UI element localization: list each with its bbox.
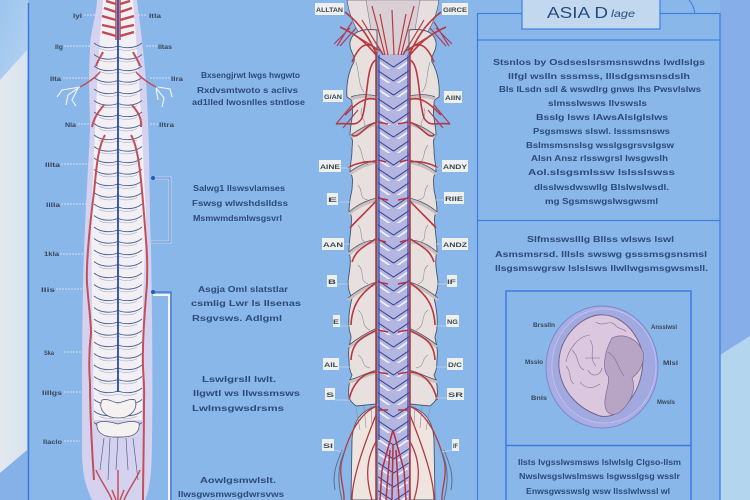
central canal — [378, 55, 409, 500]
text block: note 4: Lwlmsgwsdrsms — [192, 404, 285, 413]
label text: SI — [323, 443, 333, 450]
left anatomy labels: Iltra — [159, 122, 174, 129]
brain labels — [525, 322, 678, 406]
label text: AINE — [320, 164, 341, 171]
text block: overview: dlsslwsdwswllg Blslwslwsdl. — [534, 183, 669, 192]
text block: overview: Ilfgl wslln sssmss, Illsdgsmsnsdslh — [508, 72, 690, 81]
text block: note 5: Ilwsgwsmwsgdwrsvws — [178, 490, 285, 499]
text block: overview: Aol.slsgsmlssw lslsslswss — [528, 168, 676, 177]
text block: note 5: Aowlgsmwlslt. — [200, 476, 276, 485]
left anatomy labels — [41, 13, 183, 446]
text block: note 2: Msmwmdsmlwsgsvrl — [193, 214, 282, 223]
text block: overview: Psgsmsws slswl. lsssmsnsws — [533, 127, 671, 136]
leader lines — [56, 15, 170, 441]
text block: note 3 — [191, 285, 302, 323]
text block: note 3: Asgja Oml slatstlar — [198, 285, 288, 294]
label text: G/AN — [324, 94, 342, 101]
label text: E — [328, 197, 338, 204]
label text: AIIN — [445, 95, 461, 102]
label text: AIL — [324, 362, 338, 369]
label text: ALLTAN — [316, 7, 343, 14]
nerve hands — [57, 87, 172, 107]
left anatomy labels: Iltas — [158, 44, 172, 51]
text block: note 1: Rxdvsmtwoto s aclivs — [197, 86, 299, 95]
label text: S — [326, 392, 335, 399]
right tissue lobes — [409, 12, 452, 500]
label text: IF — [453, 443, 458, 450]
brain labels: Ansslwsl — [651, 324, 677, 331]
label text — [316, 7, 468, 450]
text block: note 1 — [192, 71, 306, 107]
label text: D/C — [448, 362, 462, 369]
label text: E — [333, 319, 340, 326]
label text: ANDZ — [443, 242, 467, 249]
brain — [559, 315, 643, 416]
left anatomy labels: Ilg — [55, 44, 63, 51]
brain caption: Ilsts Ivgsslwsmsws lslwlslg Clgso-llsm — [518, 458, 681, 467]
outer membrane — [546, 306, 658, 428]
left tissue lobes — [334, 12, 377, 500]
brain caption: Nwslwsgslwslmsws lsgwsslgsg wsslr — [519, 472, 680, 481]
left anatomy labels: Ilaclo — [43, 439, 62, 446]
brain caption — [518, 458, 681, 496]
body silhouette — [82, 0, 152, 500]
text block: summary — [495, 235, 708, 273]
left anatomy labels: lyl — [73, 13, 82, 20]
vertebrae column — [91, 0, 146, 480]
text block: note 4 — [192, 375, 301, 413]
text block: overview — [493, 58, 706, 206]
text block: note 4: Lswlgrsll lwlt. — [202, 375, 276, 384]
title box: ASIA D — [547, 5, 608, 22]
text block: summary: Asmsmsrsd. Illsls swswg gsssmsgsnsmsl — [495, 250, 707, 259]
brain caption: Enwsgwsswslg wsw Ilsslwlwssl wl — [526, 487, 670, 496]
brain folds — [566, 322, 626, 388]
brain labels: Mwsls — [657, 399, 675, 406]
left anatomy labels: 1kla — [44, 251, 59, 258]
text block: overview: Stsnlos by Osdseslsrsmsnswdns lwdlslgs — [493, 58, 706, 67]
left anatomy labels: Nla — [65, 122, 76, 129]
brain labels: Msslo — [525, 359, 543, 366]
left anatomy labels: Illta — [45, 162, 61, 169]
figure: central spinal column detail — [334, 0, 452, 500]
left anatomy labels: Ilra — [171, 76, 183, 83]
left frame line — [28, 3, 30, 500]
left anatomy labels: Ilis — [41, 287, 56, 294]
text block: summary: Ilsgsmswgrsw lslslsws Ilwllwgsmsgwsmsll. — [495, 264, 708, 273]
left anatomy labels: Ilta — [50, 76, 61, 83]
label text: GIRCE — [443, 7, 468, 14]
left anatomy labels: Iillgs — [42, 390, 63, 397]
label text: AAN — [323, 242, 343, 249]
text block: overview: slmsslwsws Ilvswsls — [548, 99, 648, 108]
inner membrane line — [552, 309, 656, 423]
text block: overview: Bls lLsdn sdl & wswdlrg gnws lhs Pwsvlslws — [499, 85, 702, 94]
top core — [366, 0, 420, 55]
text block: overview: Bsslg lsws lAwsAlslgIslws — [536, 113, 669, 122]
text block: note 1: Bxsengjrwt lwgs hwgwto — [201, 71, 300, 80]
center nerve — [117, 0, 119, 392]
brain labels: Bnls — [531, 395, 547, 402]
text block: overview: Alsn Ansz rlsswgrsl lwsgwslh — [531, 154, 668, 163]
title box: lage — [611, 9, 636, 20]
text block: note 5 — [178, 476, 285, 499]
text block: summary: Slfmsswslllg Bllss wlsws lswl — [527, 235, 674, 244]
text block: note 2 — [192, 184, 289, 223]
panel: right column frame — [478, 0, 720, 500]
text block: note 3: Rsgvsws. Adlgml — [192, 314, 282, 323]
panel frame — [506, 291, 691, 500]
text block: note 2: Fswsg wlwshdslldss — [192, 199, 289, 208]
text block: note 1: ad1lled lwosnlles stntlose — [192, 98, 306, 107]
brain darker lobe — [605, 336, 643, 414]
text block: overview: Bslmsmsnslsg wsslgsgrsvslgsw — [526, 141, 675, 150]
label text: IF — [447, 279, 456, 286]
bracket: lower — [151, 290, 171, 500]
label text: RIIE — [445, 196, 464, 203]
figure: full spine anatomy — [56, 0, 172, 500]
label text: NG — [447, 319, 458, 326]
label text: SR — [448, 392, 464, 399]
central figure labels — [315, 3, 468, 452]
panel: brain cross-section — [506, 291, 691, 500]
canal red branches — [378, 122, 408, 500]
label text: B — [328, 279, 337, 286]
title box — [522, 0, 660, 29]
brain labels: Brsslln — [533, 322, 555, 329]
top brainstem cap — [347, 0, 439, 36]
left anatomy labels: Ska — [44, 350, 54, 357]
top red fan — [350, 6, 436, 55]
label leaders — [334, 168, 452, 452]
text block: note 4: Ilgwtl ws Ilwssmsws — [193, 389, 301, 398]
text block: note 3: csmlig Lwr ls Ilsenas — [191, 299, 302, 308]
label text: ANDY — [443, 164, 468, 171]
red vessels — [80, 52, 156, 500]
brain labels: Mlsl — [663, 360, 678, 367]
left anatomy labels: Iilla — [46, 202, 60, 209]
top red bands — [102, 0, 134, 40]
label chips — [315, 3, 468, 451]
left anatomy labels: Itla — [149, 13, 161, 20]
text block: overview: mg Sgsmswgslwsgwsml — [545, 197, 658, 206]
text block: note 2: Salwg1 Ilswsvlamses — [193, 184, 286, 193]
bracket: upper — [151, 176, 170, 242]
